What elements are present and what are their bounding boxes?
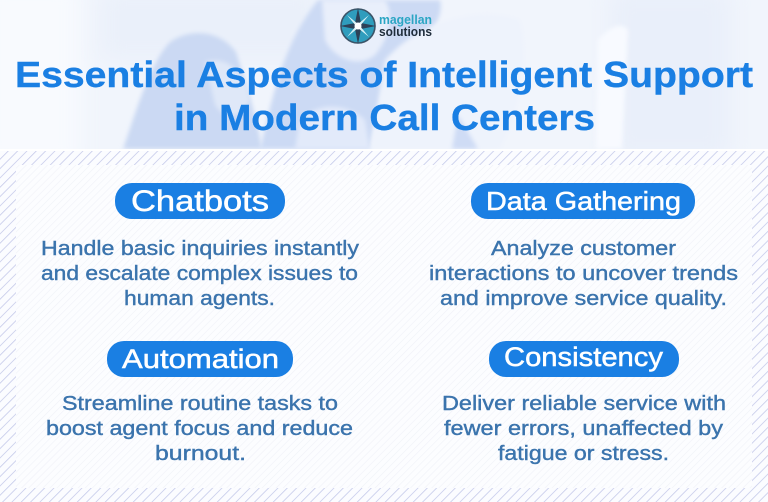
text: data gathering description: Analyze customer <box>491 238 676 260</box>
pill heading: Chatbots: Chatbots <box>131 185 269 218</box>
pill heading: Data Gathering: Data Gathering <box>486 186 681 216</box>
hatched background band <box>0 151 768 502</box>
panel: chatbots <box>41 183 359 310</box>
text: consistency description: fewer errors, unaffected by <box>444 418 723 440</box>
panel: consistency <box>442 341 726 465</box>
text: automation description <box>46 393 353 465</box>
pill heading: Automation: Automation <box>122 344 279 374</box>
logo: Magellan Solutions <box>340 8 432 44</box>
pill heading: Data Gathering <box>471 183 695 219</box>
logo wordmark: solutions <box>379 24 432 39</box>
logo wordmark: magellan <box>379 12 432 27</box>
text: chatbots description: Handle basic inquiries instantly <box>41 238 359 260</box>
title: Essential Aspects of Intelligent Support <box>15 54 753 95</box>
text: data gathering description <box>429 238 738 310</box>
title <box>15 54 753 138</box>
text: chatbots description <box>41 238 359 310</box>
text: chatbots description: and escalate complex issues to <box>41 263 358 285</box>
text: automation description: boost agent focus and reduce <box>46 418 353 440</box>
pill heading: Consistency: Consistency <box>504 342 664 372</box>
icon: compass <box>340 8 376 44</box>
text: consistency description: fatigue or stress. <box>498 443 669 465</box>
text: chatbots description: human agents. <box>124 288 275 310</box>
header photo background <box>68 0 768 149</box>
content panel <box>16 165 752 488</box>
title: in Modern Call Centers <box>174 97 595 138</box>
text: consistency description <box>442 393 726 465</box>
text: automation description: Streamline routine tasks to <box>62 393 338 415</box>
logo wordmark <box>379 12 432 39</box>
text: consistency description: Deliver reliable service with <box>442 393 726 415</box>
text: data gathering description: interactions to uncover trends <box>429 263 738 285</box>
pill heading: Consistency <box>489 341 679 377</box>
panel: data gathering <box>429 183 738 310</box>
pill heading: Chatbots <box>115 183 285 219</box>
text: automation description: burnout. <box>155 443 246 465</box>
panel: automation <box>46 341 353 465</box>
text: data gathering description: and improve service quality. <box>440 288 727 310</box>
pill heading: Automation <box>107 341 293 377</box>
